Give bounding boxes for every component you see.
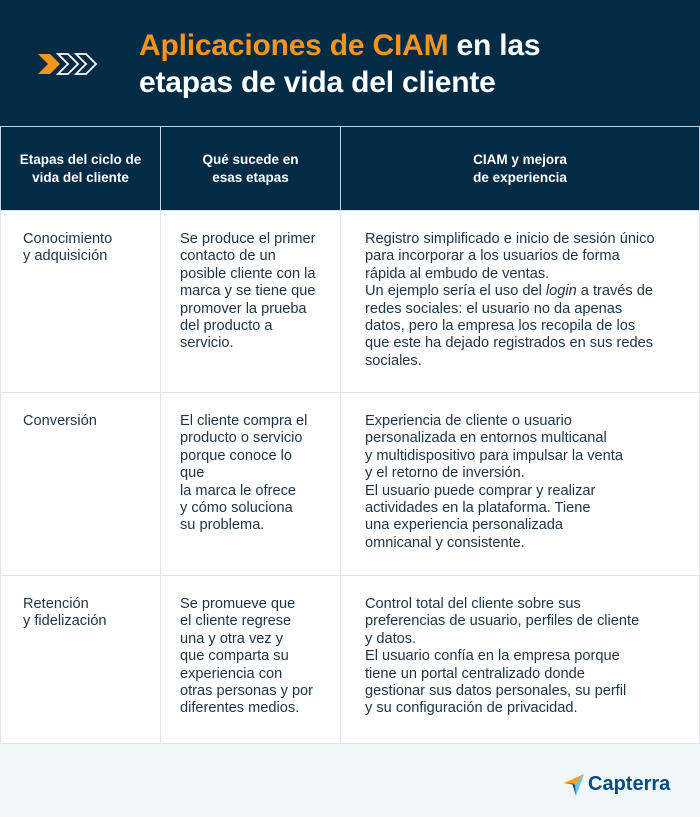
row 2 what: producto o servicio [180,430,302,446]
row 3 stage: y fidelización [23,613,107,629]
row 3 ciam: tiene un portal centralizado donde [365,666,585,682]
row 2 ciam: y multidispositivo para impulsar la venta [365,448,623,464]
row 2 what: que [180,465,204,481]
table header col2 [160,126,341,211]
logo: Capterra: Capterra [588,773,670,795]
row 2 what: porque conoce lo [180,448,292,464]
row 1 stage: y adquisición [23,248,107,264]
row 1 what [160,210,341,393]
row 1 what: servicio. [180,335,234,351]
row 2 stage: Conversión [23,413,97,429]
title: Aplicaciones de CIAM en las [139,29,540,62]
row 2 ciam: Experiencia de cliente o usuario [365,413,572,429]
row 1 what: del producto a [180,318,272,334]
row 1 ciam: que este ha dejado registrados en sus redes [365,335,653,351]
row 3 what: una y otra vez y [180,631,283,647]
row 1 ciam: Registro simplificado e inicio de sesión único [365,231,655,247]
row 2 ciam: y el retorno de inversión. [365,465,525,481]
row 3 stage [0,575,161,744]
row 2 what: El cliente compra el [180,413,307,429]
table header col2: Qué sucede en [202,152,299,166]
row 3 what [160,575,341,744]
table header col1: vida del cliente [32,170,129,184]
row 3 what: el cliente regrese [180,613,291,629]
row 2 ciam: una experiencia personalizada [365,517,563,533]
title: etapas de vida del cliente [139,66,496,99]
row 1 what: contacto de un [180,248,276,264]
row 2 ciam: actividades en la plataforma. Tiene [365,500,591,516]
row 3 ciam: Control total del cliente sobre sus [365,596,581,612]
icon: chevrons [38,53,98,75]
row 1 ciam: rápida al embudo de ventas. [365,266,549,282]
row 2 ciam: omnicanal y consistente. [365,535,525,551]
row 1 ciam: sociales. [365,353,422,369]
table header col3 [340,126,700,211]
row 2 what [160,392,341,576]
row 2 what: y cómo soluciona [180,500,293,516]
table header col3: de experiencia [473,170,567,184]
table header col2: esas etapas [212,170,289,184]
row 1 stage [0,210,161,393]
row 3 what: otras personas y por [180,683,313,699]
row 3 stage: Retención [23,596,89,612]
row 2 what: la marca le ofrece [180,483,296,499]
row 2 stage [0,392,161,576]
row 1 what: posible cliente con la [180,266,315,282]
title [139,29,540,99]
row 3 what: experiencia con [180,666,282,682]
header banner [0,0,700,126]
row 1 what: promover la prueba [180,301,307,317]
row 1 ciam: Un ejemplo sería el uso del login a través de [365,283,653,299]
row 3 what: que comparta su [180,648,289,664]
row 2 what: su problema. [180,517,264,533]
row 3 ciam: gestionar sus datos personales, su perfil [365,683,626,699]
table header col3: CIAM y mejora [473,152,567,166]
row 3 ciam: preferencias de usuario, perfiles de cliente [365,613,639,629]
row 2 ciam [340,392,700,576]
row 3 ciam: y su configuración de privacidad. [365,700,578,716]
row 2 ciam: El usuario puede comprar y realizar [365,483,595,499]
row 3 ciam: El usuario confía en la empresa porque [365,648,620,664]
row 1 ciam: redes sociales: el usuario no da apenas [365,301,622,317]
row 3 what: Se promueve que [180,596,295,612]
row 1 what: Se produce el primer [180,231,315,247]
table header col1: Etapas del ciclo de [20,152,141,166]
row 1 ciam: datos, pero la empresa los recopila de los [365,318,635,334]
row 1 ciam: para incorporar a los usuarios de forma [365,248,620,264]
row 1 ciam [340,210,700,393]
row 3 what: diferentes medios. [180,700,299,716]
table header col1 [0,126,161,211]
row 1 what: marca y se tiene que [180,283,315,299]
row 3 ciam [340,575,700,744]
row 3 ciam: y datos. [365,631,416,647]
row 2 ciam: personalizada en entornos multicanal [365,430,607,446]
row 1 stage: Conocimiento [23,231,112,247]
